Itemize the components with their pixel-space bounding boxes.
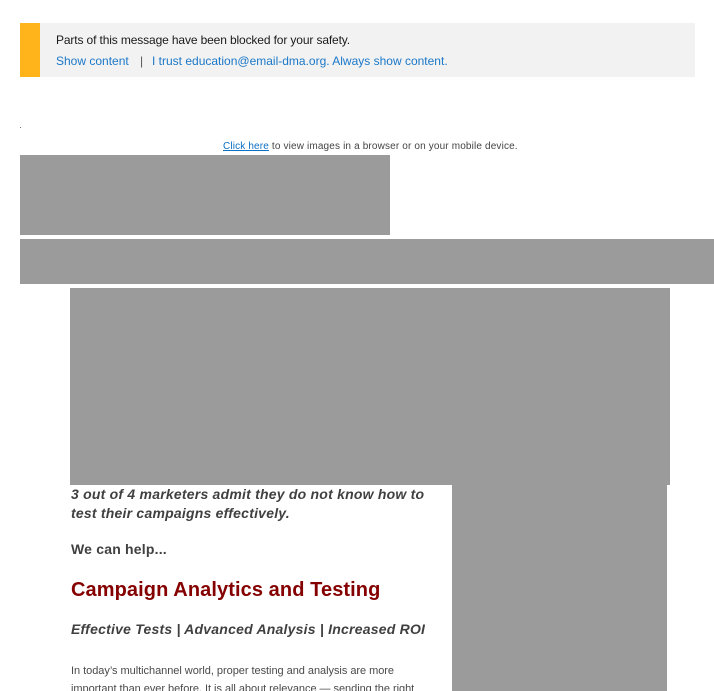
view in browser line: Click here to view images in a browser or on your mobile device. xyxy=(223,141,518,152)
we can help: We can help... xyxy=(71,541,167,557)
safety banner xyxy=(20,23,695,77)
trust sender link: I trust education@email-dma.org. Always show content. xyxy=(152,54,448,68)
subheading: Effective Tests | Advanced Analysis | Increased ROI xyxy=(71,621,425,637)
heading: Campaign Analytics and Testing xyxy=(71,579,380,601)
blocked image: logo xyxy=(20,155,390,235)
blocked image: hero xyxy=(70,288,670,485)
banner actions xyxy=(56,54,448,68)
show content link: Show content xyxy=(56,54,129,68)
banner accent bar xyxy=(20,23,40,77)
separator: | xyxy=(140,54,143,68)
banner message: Parts of this message have been blocked for your safety. xyxy=(56,33,350,47)
intro statement: 3 out of 4 marketers admit they do not know how to xyxy=(71,486,424,502)
intro statement: test their campaigns effectively. xyxy=(71,505,290,521)
body text: In today’s multichannel world, proper testing and analysis are more xyxy=(71,665,394,677)
blocked image: sidebar xyxy=(452,485,667,691)
intro statement xyxy=(71,486,424,521)
tiny dot xyxy=(20,127,21,128)
body text xyxy=(71,665,414,691)
blocked image: navigation banner xyxy=(20,239,714,284)
